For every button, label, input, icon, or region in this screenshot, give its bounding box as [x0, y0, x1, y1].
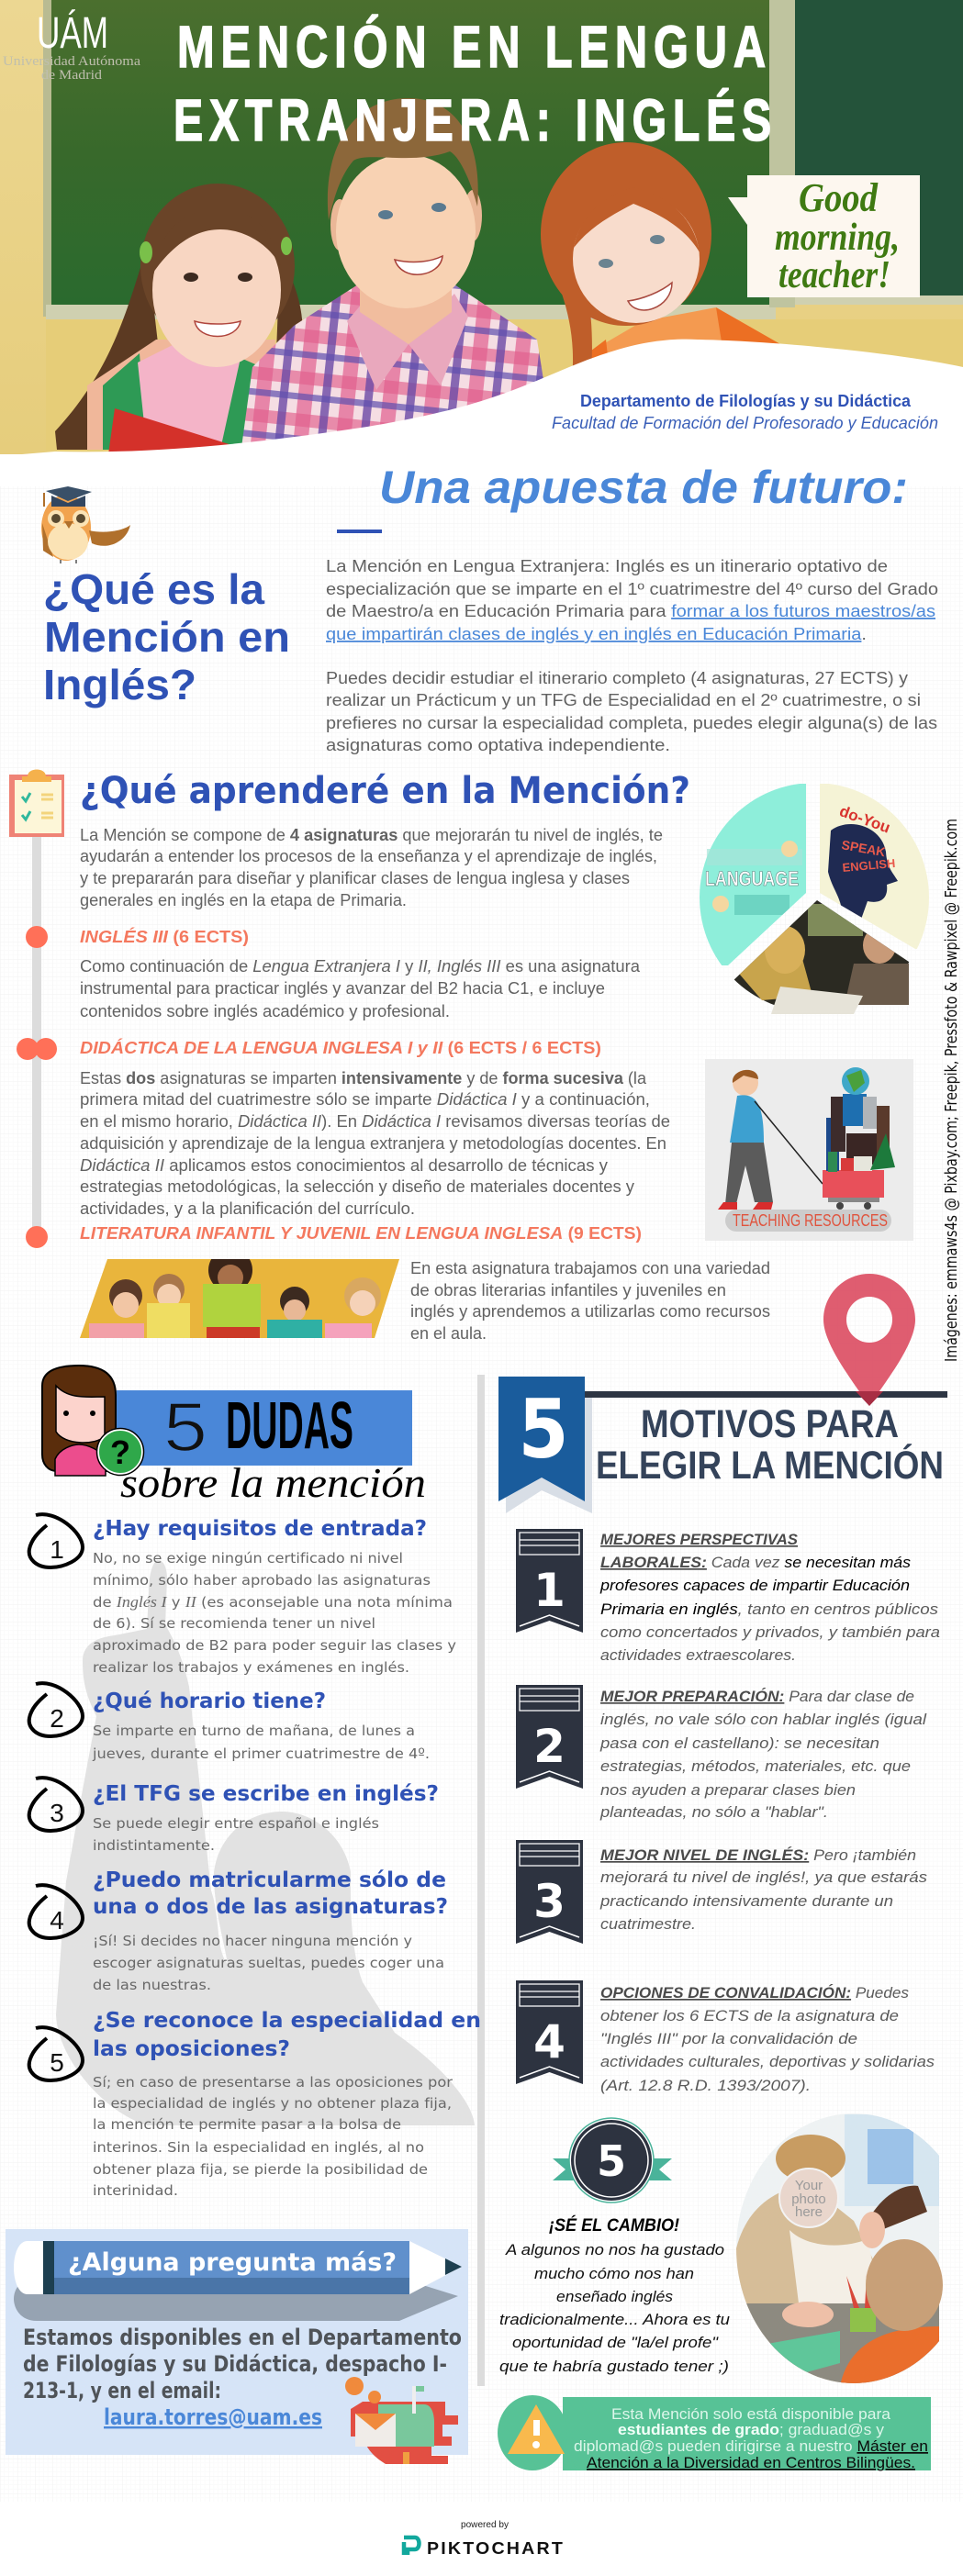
question 3: indistintamente.	[93, 1837, 215, 1854]
pie wedge: do you speak English	[820, 784, 929, 949]
text block: overview: ayudarán a entender los procesos de la enseñanza y el aprendizaje de inglés,	[80, 847, 657, 865]
text block: Literatura: inglés y aprendemos a utilizarlas como recursos	[410, 1302, 770, 1321]
question 2: jueves, durante el primer cuatrimestre de 4º.	[92, 1745, 430, 1762]
reason 3: mejorará tu nivel de inglés!, ya que estarás	[600, 1868, 928, 1886]
text block: be the change: ¡SÉ EL CAMBIO!	[549, 2215, 679, 2236]
text block: intro: que impartirán clases de inglés y en inglés en Educación Primaria .	[326, 625, 867, 643]
pie wedge: classroom photo	[734, 900, 909, 1014]
icon: girl with question mark: ?	[110, 1433, 130, 1471]
banner	[117, 1390, 412, 1466]
white wave	[0, 340, 963, 486]
question 4: ¿Puedo matricularme sólo de	[93, 1868, 446, 1892]
logo: Universidad Autónoma de Madrid: Universidad Autónoma	[3, 54, 140, 69]
silhouette: person pointing up	[56, 1560, 475, 2125]
icon: pencil banner	[14, 2241, 462, 2321]
department text: Departamento de Filologías y su Didáctica	[580, 392, 912, 410]
panel: contact	[6, 2229, 468, 2464]
icon: mailbox	[345, 2377, 458, 2464]
question 5: obtener plaza fija, se pierde la posibilidad de	[93, 2161, 428, 2178]
text block: be the change: mucho cómo nos han	[534, 2265, 694, 2282]
contact text: de Filologías y su Didáctica, despacho I-	[23, 2351, 447, 2377]
pie wedge: do you speak English: SPEAK	[840, 837, 887, 859]
question 3: ¿El TFG se escribe en inglés?	[93, 1782, 439, 1806]
question 2: Se imparte en turno de mañana, de lunes a	[93, 1723, 415, 1739]
icon: blue ribbon	[498, 1377, 585, 1501]
question 4	[29, 1868, 448, 1993]
child: boy in plaid shirt	[241, 98, 555, 454]
text block: intro: de Maestro/a en Educación Primaria para formar a los futuros maestros/as	[326, 602, 935, 620]
text block: Didáctica: en el mismo horario, Didáctica II). En Didáctica I revisamos diversas teorías de	[80, 1112, 670, 1131]
title: MENCIÓN EN LENGUA	[177, 14, 772, 80]
text block: overview: La Mención se compone de 4 asignaturas que mejorarán tu nivel de inglés, te	[80, 826, 663, 844]
question 4: de las nuestras.	[93, 1977, 211, 1993]
reason 3	[516, 1840, 928, 1944]
heading: ¿Qué es la Mención en Inglés?: Mención en	[44, 613, 290, 661]
section header: 5 dudas	[42, 1366, 426, 1506]
contact text: Estamos disponibles en el Departamento	[23, 2325, 462, 2350]
badge 3	[516, 1840, 583, 1944]
photo placeholder: Your	[795, 2178, 823, 2193]
title: EXTRANJERA: INGLÉS	[174, 87, 778, 153]
pie wedge: do you speak English: ENGLISH	[842, 856, 896, 875]
question 3: Se puede elegir entre español e inglés	[93, 1815, 379, 1832]
footer: Piktochart: powered by	[461, 2520, 509, 2530]
text block: Literatura: En esta asignatura trabajamos con una variedad	[410, 1259, 770, 1277]
reason 4: OPCIONES DE CONVALIDACIÓN: Puedes	[600, 1984, 909, 2002]
icon: clipboard checklist	[9, 769, 64, 837]
reason 2	[516, 1685, 927, 1821]
question 1: No, no se exige ningún certificado ni nivel	[93, 1550, 403, 1567]
text block: Inglés III: Como continuación de Lengua Extranjera I y II, Inglés III es una asignatura	[80, 957, 641, 976]
question 2	[29, 1683, 430, 1762]
contact text: laura.torres@uam.es	[104, 2404, 322, 2430]
number mark 2: 2	[50, 1704, 64, 1733]
reason 1: LABORALES: Cada vez se necesitan más	[600, 1554, 912, 1571]
icon: girl with question mark	[42, 1366, 143, 1476]
text block: intro: La Mención en Lengua Extranjera: Inglés es un itinerario optativo de	[326, 557, 888, 575]
text block: intro: realizar un Prácticum y un TFG de Especialidad en el 2º cuatrimestre, o si	[326, 691, 921, 709]
text block: Didáctica: adquisición y aprendizaje de la lengua extranjera y metodologías docentes. En	[80, 1134, 666, 1153]
reason 1: MEJORES PERSPECTIVAS	[600, 1531, 799, 1548]
heading: ¿Qué es la Mención en Inglés?: ¿Qué es la	[43, 565, 264, 613]
speech bubble: Good morning, teacher!: morning,	[775, 217, 900, 259]
heading: ¿Qué aprenderé en la Mención?: ¿Qué aprenderé en la Mención?	[80, 770, 690, 812]
icon: location pin	[823, 1274, 915, 1406]
text block: intro: Puedes decidir estudiar el itinerario completo (4 asignaturas, 27 ECTS) y	[326, 669, 908, 687]
title text: MOTIVOS PARA	[641, 1402, 899, 1446]
question 1: de 6). Sí se recomienda tener un nivel	[93, 1615, 375, 1632]
icon: owl with graduation cap	[41, 486, 130, 563]
badge 5 medallion	[553, 2118, 672, 2202]
callout: eligibility notice	[498, 2395, 931, 2471]
number mark 2	[29, 1683, 83, 1736]
text block: Inglés III: instrumental para practicar inglés y avanzar del B2 hacia C1, e incluye	[80, 979, 605, 998]
text block: Didáctica: actividades, y a la planificación del currículo.	[80, 1199, 415, 1218]
pie wedge: language doodles	[700, 784, 806, 965]
contact text: 213-1, y en el email:	[23, 2378, 221, 2403]
badge 1: 1	[533, 1564, 565, 1617]
text block: Inglés III	[80, 957, 641, 1020]
reason 4: (Art. 12.8 R.D. 1393/2007).	[600, 2077, 811, 2094]
reason 5	[499, 2111, 943, 2386]
reason 3: cuatrimestre.	[600, 1915, 696, 1933]
notice text: estudiantes de grado ; graduad@s y	[618, 2421, 885, 2438]
number mark 3: 3	[50, 1799, 64, 1827]
badge 1	[516, 1529, 583, 1633]
question 3	[29, 1778, 439, 1854]
reason 2: pasa con el castellano): se necesitan	[599, 1734, 879, 1752]
question 1	[29, 1514, 456, 1676]
text block: overview: generales en inglés en la etapa de Primaria.	[80, 891, 407, 909]
reason 1: Primaria en inglés , tanto en centros públicos	[600, 1600, 939, 1618]
text block: Didáctica: Didáctica II aplicamos estos conocimientos al desarrollo de técnicas y	[80, 1156, 608, 1175]
number mark 4: 4	[50, 1906, 64, 1935]
text block: be the change: que te habría gustado tener ;)	[499, 2358, 729, 2375]
timeline dot: Inglés III	[26, 926, 48, 948]
pie wedge: do you speak English: do-You	[837, 802, 892, 837]
pin tip over rule	[856, 1391, 883, 1406]
logo: Universidad Autónoma de Madrid: de Madrid	[41, 68, 103, 83]
section header: 5 motivos	[498, 1377, 947, 1513]
text block: Didáctica: estrategias metodológicas, la selección y diseño de materiales docentes y	[80, 1177, 634, 1196]
number 5: 5	[163, 1388, 207, 1466]
subtitle: sobre la mención	[120, 1459, 426, 1506]
text block: intro: asignaturas como optativa independiente.	[326, 736, 670, 754]
logo: Universidad Autónoma de Madrid: UÁM	[37, 9, 108, 58]
question 4: ¡Sí! Si decides no hacer ninguna mención y	[93, 1933, 412, 1949]
hero photo: three children at chalkboard	[0, 0, 963, 454]
icon: ribbon shadow	[506, 1398, 592, 1513]
text block: overview	[80, 826, 663, 909]
question 1: mínimo, sólo haber aprobado las asignaturas	[93, 1572, 431, 1589]
number mark 4	[29, 1885, 83, 1938]
question 4: una o dos de las asignaturas?	[93, 1895, 448, 1919]
image: three-wedge photo pie	[700, 783, 929, 1014]
heading: ¿Qué es la Mención en Inglés?	[43, 565, 290, 708]
reason 2: inglés, no vale sólo con hablar inglés (igual	[600, 1711, 927, 1728]
question 5: interinidad.	[93, 2182, 178, 2199]
text block: be the change: tradicionalmente... Ahora es tu	[499, 2311, 731, 2328]
subject heading: Inglés III: INGLÉS III (6 ECTS)	[80, 927, 249, 946]
word DUDAS: DUDAS	[226, 1389, 353, 1463]
label: Teaching Resources: TEACHING RESOURCES	[733, 1211, 888, 1230]
badge 4: 4	[533, 2015, 565, 2069]
question 4: escoger asignaturas sueltas, puedes coger una	[93, 1955, 444, 1971]
notice text: diplomad@s pueden dirigirse a nuestro Máster en	[574, 2437, 928, 2455]
text block: Inglés III: contenidos sobre inglés académico y profesional.	[80, 1002, 450, 1020]
text block: be the change	[499, 2215, 731, 2375]
badge 3: 3	[533, 1875, 565, 1928]
text block: Didáctica: primera mitad del cuatrimestre sólo se imparte Didáctica I y a continuación,	[80, 1090, 650, 1109]
department text	[552, 392, 938, 432]
heading: ¿Qué es la Mención en Inglés?: Inglés?	[43, 661, 196, 708]
number mark 3	[29, 1778, 83, 1831]
grid paper background	[0, 485, 963, 2502]
reason 1: profesores capaces de impartir Educación	[599, 1577, 910, 1594]
question 5: la mención te permite pasar a la bolsa de	[93, 2116, 401, 2133]
text block: Literatura	[410, 1259, 770, 1343]
notice text	[574, 2405, 928, 2471]
icon: pencil banner: ¿Alguna pregunta más?	[68, 2248, 397, 2277]
text block: be the change: enseñado inglés	[556, 2288, 674, 2305]
contact text	[23, 2325, 462, 2430]
logo mark	[404, 2537, 419, 2555]
reason 4	[516, 1980, 935, 2094]
timeline dot: Literatura	[26, 1226, 48, 1248]
number mark 1	[29, 1514, 83, 1567]
notice text: Esta Mención solo está disponible para	[611, 2405, 891, 2423]
badge 2	[516, 1685, 583, 1789]
photo placeholder	[779, 2169, 838, 2227]
reason 1: como concertados y privados, y también para	[600, 1623, 940, 1641]
text block: intro: especialización que se imparte en el 1º cuatrimestre del 4º curso del Grado	[326, 580, 938, 598]
label: Teaching Resources	[725, 1210, 891, 1232]
text block: Didáctica	[80, 1069, 670, 1218]
child: left girl	[55, 184, 303, 454]
reason 2: planteadas, no sólo a "hablar".	[599, 1803, 828, 1821]
text block: Didáctica: Estas dos asignaturas se imparten intensivamente y de forma sucesiva (la	[80, 1069, 647, 1087]
question 5: interinos. Sin la especialidad en inglés, al no	[93, 2139, 424, 2156]
question 2: ¿Qué horario tiene?	[93, 1689, 326, 1713]
reason 1: actividades extraescolares.	[600, 1646, 796, 1664]
title	[174, 14, 778, 153]
text block: intro: prefieres no cursar la especialidad completa, puedes elegir alguna(s) de las	[326, 714, 937, 732]
image: teacher with children	[734, 2111, 943, 2386]
question 1: ¿Hay requisitos de entrada?	[93, 1517, 427, 1541]
number 5: 5	[518, 1382, 569, 1477]
reason 2: estrategias, métodos, materiales, etc. que	[600, 1757, 911, 1775]
reason 4: actividades culturales, deportivas y solidarias	[600, 2053, 935, 2070]
image credits: Imágenes: emmaws4s @ Pixbay.com; Freepik, Pressfoto & Rawpixel @ Freepik.com	[942, 819, 961, 1362]
department text: Facultad de Formación del Profesorado y Educación	[552, 414, 938, 432]
footer: Piktochart: PIKTOCHART	[427, 2539, 565, 2558]
notice text: Atención a la Diversidad en Centros Bilingües.	[587, 2454, 915, 2471]
question 5: Sí; en caso de presentarse a las oposiciones por	[93, 2074, 454, 2091]
image: children reading books	[80, 1259, 399, 1338]
reason 4: "Inglés III" por la convalidación de	[600, 2030, 857, 2047]
image: teaching resources	[705, 1059, 913, 1241]
number mark 5	[29, 2027, 83, 2080]
photo placeholder: here	[795, 2204, 823, 2220]
column divider	[477, 1375, 485, 2386]
child: red-haired girl	[541, 142, 791, 454]
photo placeholder: photo	[791, 2191, 826, 2207]
reason 4: obtener los 6 ECTS de la asignatura de	[600, 2007, 899, 2024]
text block: overview: y te prepararán para diseñar y planificar clases de lengua inglesa y clases	[80, 869, 630, 887]
timeline dots: Didáctica	[17, 1038, 57, 1060]
figure: boy pulling cart	[718, 1070, 773, 1210]
rule	[585, 1391, 947, 1398]
icon: warning triangle	[508, 2404, 565, 2454]
speech bubble: Good morning, teacher!: Good	[799, 175, 879, 220]
accent dash	[337, 530, 382, 533]
speech bubble: Good morning, teacher!: teacher!	[778, 254, 890, 296]
reason 2: nos ayuden a preparar clases bien	[600, 1781, 856, 1799]
number mark 1: 1	[50, 1535, 64, 1564]
badge 2: 2	[533, 1720, 565, 1773]
title text	[596, 1402, 944, 1488]
question 1: realizar los trabajos y exámenes en inglés.	[93, 1659, 409, 1676]
text block: be the change: oportunidad de "la/el profe"	[512, 2334, 719, 2351]
subject heading: Didáctica: DIDÁCTICA DE LA LENGUA INGLESA I y II (6 ECTS / 6 ECTS)	[80, 1038, 601, 1057]
subject heading: Literatura: LITERATURA INFANTIL Y JUVENIL EN LENGUA INGLESA (9 ECTS)	[80, 1224, 642, 1243]
number mark 5: 5	[50, 2048, 64, 2077]
badge 5 medallion: 5	[597, 2136, 626, 2186]
question 5: la especialidad de inglés y no obtener plaza fija,	[93, 2095, 452, 2112]
question 1: aproximado de B2 para poder seguir las clases y	[93, 1637, 456, 1654]
question 5: las oposiciones?	[93, 2037, 290, 2061]
text block: Literatura: de obras literarias infantiles y juveniles en	[410, 1281, 726, 1299]
text block: be the change: A algunos no nos ha gustado	[505, 2241, 724, 2258]
reason 3: practicando intensivamente durante un	[599, 1892, 893, 1910]
logo: Universidad Autónoma de Madrid	[3, 9, 140, 83]
text block: intro	[326, 557, 938, 754]
text block: Literatura: en el aula.	[410, 1324, 487, 1343]
footer: Piktochart	[404, 2520, 565, 2558]
reason 2: MEJOR PREPARACIÓN: Para dar clase de	[600, 1688, 914, 1705]
badge 4	[516, 1980, 583, 2084]
timeline bar	[32, 837, 41, 1237]
speech bubble: Good morning, teacher!	[728, 175, 920, 297]
reason 3: MEJOR NIVEL DE INGLÉS: Pero ¡también	[600, 1846, 916, 1864]
reason 1	[516, 1529, 940, 1664]
figure: cart of books	[755, 1067, 895, 1210]
pie wedge: language doodles: LANGUAGE	[705, 867, 799, 890]
question 5: ¿Se reconoce la especialidad en	[93, 2009, 481, 2033]
question 5	[29, 2009, 481, 2199]
question 1: de Inglés I y II (es aconsejable una nota mínima	[93, 1593, 453, 1611]
heading: Una apuesta de futuro: Una apuesta de futuro:	[379, 462, 908, 513]
